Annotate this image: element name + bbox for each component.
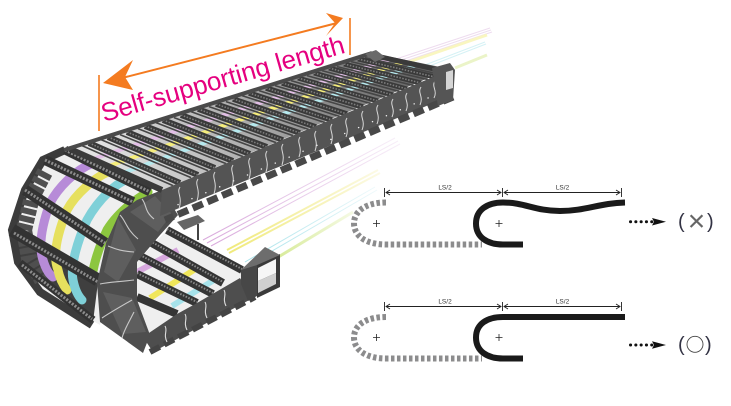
cable strands behind the chain, lower — [203, 138, 400, 265]
black straight carrier — [476, 317, 625, 358]
centre marks — [373, 334, 502, 341]
lower run cables — [137, 250, 214, 306]
side plates — [160, 70, 453, 216]
lower run of the chain — [137, 215, 280, 352]
dotted arrow — [630, 341, 666, 349]
side plate teeth — [165, 97, 453, 220]
deck far rail — [64, 53, 372, 150]
bend cross bars — [12, 150, 150, 320]
verdict: not acceptable: ( — [678, 211, 685, 233]
bend link joints — [100, 199, 154, 338]
arrow: self-supporting length span — [99, 13, 350, 131]
deck bars, far — [298, 55, 448, 101]
LS/2 label right: LS/2 — [556, 298, 570, 306]
black carrier with sag — [476, 202, 625, 244]
side plate link joints — [179, 81, 435, 209]
deck bar teeth — [89, 59, 435, 183]
upper end bracket — [365, 50, 455, 106]
verdict: acceptable: ) — [705, 334, 712, 356]
dashed grey carrier — [354, 317, 482, 358]
lower run cross bars — [137, 230, 242, 314]
bend cables — [41, 163, 148, 300]
verdict: acceptable — [678, 334, 712, 356]
bend bar teeth — [14, 150, 150, 319]
verdict: not acceptable: ) — [707, 211, 714, 233]
centre marks — [373, 220, 502, 227]
dimension line — [384, 302, 622, 311]
deck cables — [93, 59, 416, 173]
bend side plates — [97, 190, 178, 353]
cable strands behind the chain, upper — [387, 28, 492, 70]
diagram: straight correct span — [354, 298, 712, 358]
bend of the chain — [12, 150, 178, 353]
bend inner space — [12, 150, 150, 325]
LS/2 label left: LS/2 — [438, 184, 452, 192]
bend lower dark band — [12, 232, 98, 322]
far rim lattice — [12, 150, 92, 325]
verdict: acceptable: ( — [678, 334, 685, 356]
deck bars, near — [70, 115, 267, 190]
far side tab — [177, 215, 205, 240]
deck — [68, 53, 450, 190]
upper run of the chain — [64, 50, 455, 220]
side plate pins — [170, 92, 442, 208]
lower run link joints — [165, 290, 226, 342]
verdict: not acceptable — [678, 205, 714, 238]
LS/2 label right: LS/2 — [556, 184, 570, 192]
deck bars, middle — [198, 83, 363, 140]
bend side facets — [103, 196, 172, 334]
LS/2 label left: LS/2 — [438, 298, 452, 306]
label: self-supporting length: Self-supporting length — [97, 29, 348, 128]
dashed grey carrier — [354, 202, 482, 244]
verdict: not acceptable: × — [688, 205, 705, 238]
deck secondary bars — [82, 58, 441, 186]
lower run end bracket — [241, 247, 280, 301]
lower run side plates — [143, 278, 253, 352]
dotted arrow — [630, 218, 666, 226]
cross bar teeth — [137, 229, 242, 302]
dimension line — [384, 188, 622, 197]
diagram: wavy incorrect sag — [354, 184, 714, 244]
